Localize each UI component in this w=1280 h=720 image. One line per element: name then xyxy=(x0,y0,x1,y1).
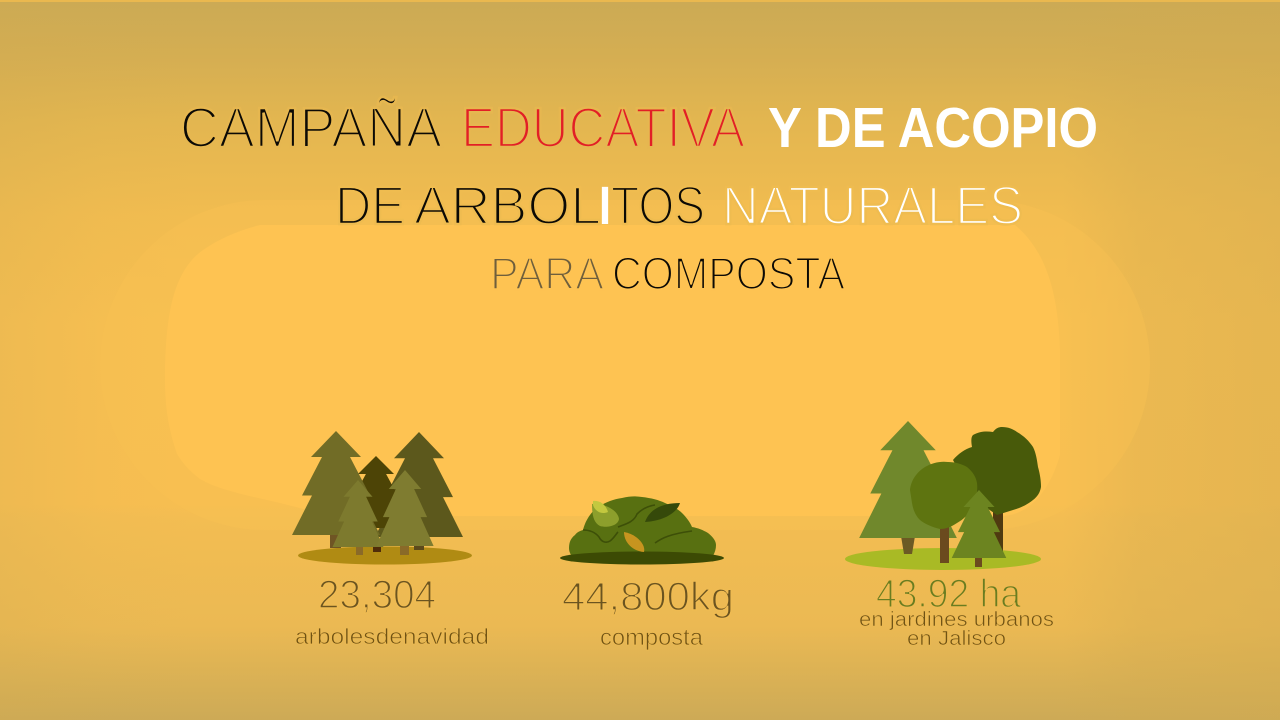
title line 2: ARBOL xyxy=(414,176,601,236)
label: arboles de navidad: arbolesdenavidad xyxy=(295,624,489,649)
label: en jardines urbanos en Jalisco xyxy=(859,609,1054,650)
title line 2: DE xyxy=(335,176,405,236)
title line 3: COMPOSTA xyxy=(612,248,845,299)
title line 1: CAMPAÑA xyxy=(180,96,442,160)
title line 3 xyxy=(490,248,845,299)
title xyxy=(180,96,1098,299)
icon: mixed trees on green ground xyxy=(845,421,1041,570)
label: composta: composta xyxy=(600,624,703,650)
title line 2: I xyxy=(599,176,611,236)
number: 44,800kg: 44,800kg xyxy=(562,575,734,619)
stat: compost xyxy=(560,496,734,650)
title line 3: PARA xyxy=(490,248,604,299)
stat: christmas trees xyxy=(292,431,489,649)
icon: group of pine trees xyxy=(292,431,472,564)
label: en jardines urbanos en Jalisco: en Jalisco xyxy=(907,628,1006,650)
title line 2 xyxy=(335,176,1023,236)
number: 43.92 ha: 43.92 ha xyxy=(876,572,1022,616)
title line 1: Y DE ACOPIO xyxy=(768,96,1098,160)
title line 2: TOS xyxy=(611,176,705,236)
stat: urban gardens xyxy=(845,421,1054,650)
title line 1: EDUCATIVA xyxy=(461,96,745,160)
title line 2: NATURALES xyxy=(722,176,1023,236)
number: 23,304: 23,304 xyxy=(318,573,436,617)
title line 1 xyxy=(180,96,1098,160)
label: en jardines urbanos en Jalisco: en jardines urbanos xyxy=(859,609,1054,631)
icon: compost mound with leaves xyxy=(560,496,724,564)
